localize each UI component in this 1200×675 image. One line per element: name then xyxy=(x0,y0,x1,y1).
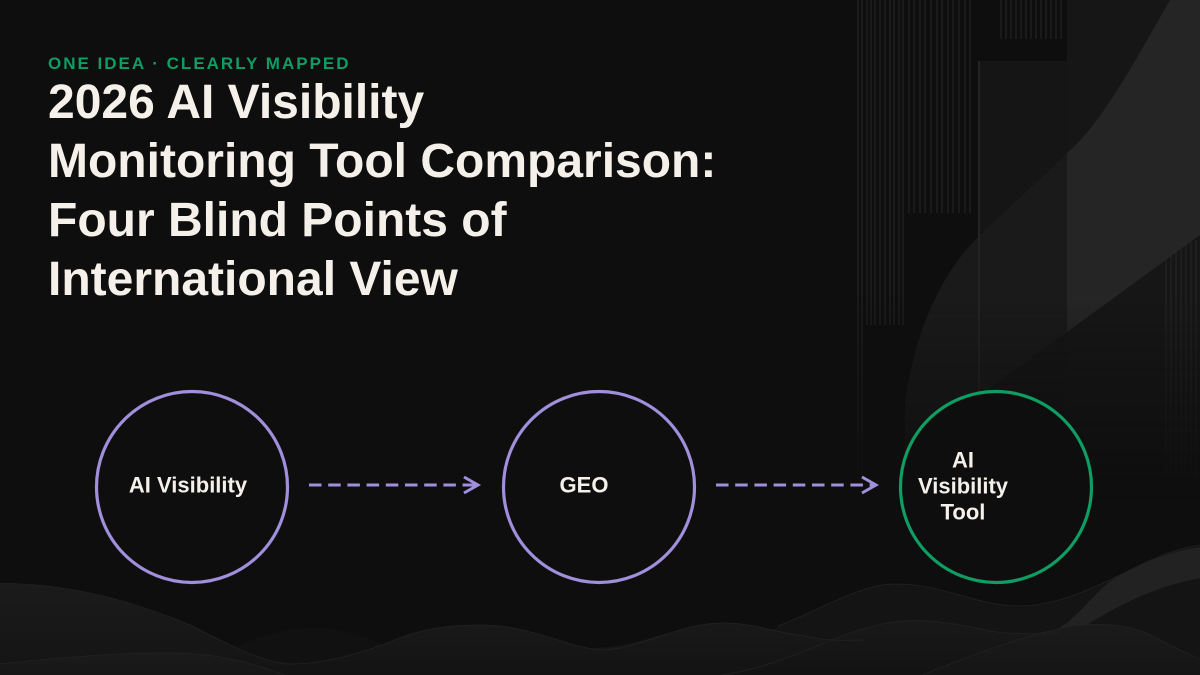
title: Monitoring Tool Comparison: xyxy=(48,135,716,188)
arrow: GEO to AI Visibility Tool xyxy=(716,477,876,493)
node: AI Visibility Tool: Visibility xyxy=(918,474,1009,498)
node: GEO: GEO xyxy=(560,472,608,498)
arrow: AI Visibility to GEO xyxy=(309,477,478,493)
node: AI Visibility xyxy=(96,392,288,582)
node: GEO xyxy=(504,392,694,582)
eyebrow label: ONE IDEA · CLEARLY MAPPED xyxy=(48,54,351,73)
node: AI Visibility Tool: AI xyxy=(952,448,974,472)
title: 2026 AI Visibility xyxy=(48,76,424,129)
decorative hills at the bottom xyxy=(0,542,1200,675)
node: AI Visibility Tool: Tool xyxy=(941,500,985,524)
title: Four Blind Points of xyxy=(48,194,507,247)
decorative backdrop: blocks, ribbon and vertical lines xyxy=(858,0,1200,422)
title: International View xyxy=(48,253,458,306)
node: AI Visibility: AI Visibility xyxy=(129,472,248,498)
title xyxy=(48,76,716,306)
node: AI Visibility Tool xyxy=(900,392,1092,582)
